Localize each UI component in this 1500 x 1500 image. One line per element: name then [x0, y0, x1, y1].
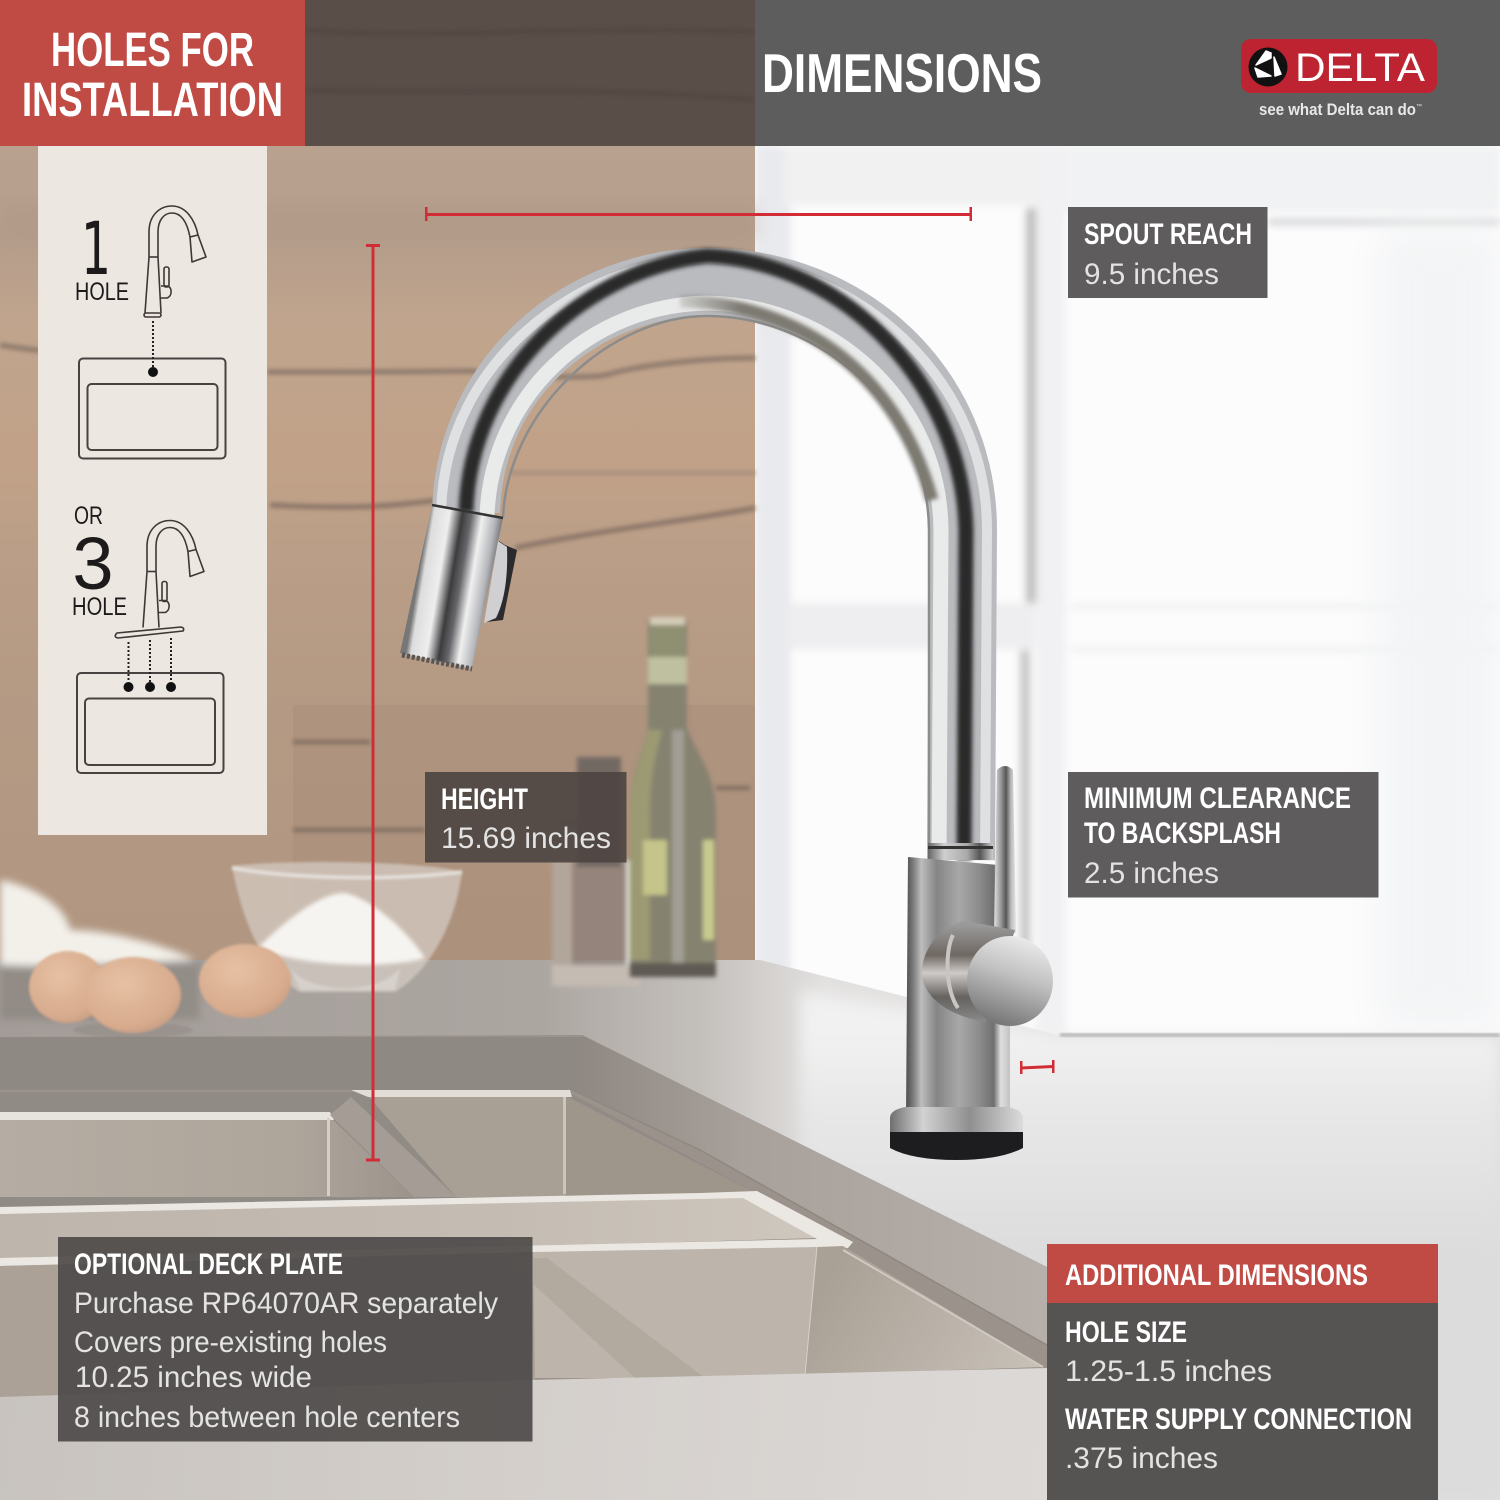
callout: optional deck plate: OPTIONAL DECK PLATE: [74, 1248, 343, 1281]
faucet: [400, 256, 1053, 1160]
icon: faucet on deck plate: [115, 520, 204, 638]
callout: height: [425, 772, 626, 862]
callout: spout reach: SPOUT REACH: [1084, 218, 1252, 251]
callout: minimum clearance: 2.5 inches: [1084, 857, 1219, 890]
hole size: 1.25-1.5 inches: [1065, 1355, 1272, 1388]
logo: Delta: [1241, 39, 1437, 119]
blurred props: towel, eggs, bowl, glass, bottle: [0, 617, 716, 1038]
header: holes for installation: [0, 0, 305, 146]
dimension line: height: [366, 244, 380, 1162]
callout: spout reach: [1068, 207, 1268, 298]
label: or 3 hole: OR: [74, 502, 103, 530]
panel heading: [1047, 1244, 1438, 1303]
label: or 3 hole: 3: [72, 522, 114, 605]
title: dimensions: DIMENSIONS: [762, 42, 1042, 104]
callout: optional deck plate: 8 inches between hole centers: [74, 1401, 460, 1434]
handle knob: [967, 936, 1053, 1026]
wine bottle: [630, 617, 716, 977]
bowl divider: [330, 1097, 456, 1197]
label: or 3 hole: HOLE: [72, 593, 127, 621]
callout: optional deck plate: Purchase RP64070AR separately: [74, 1287, 498, 1320]
drinking glass and grinder: [552, 757, 640, 986]
window wall: [755, 146, 1500, 1106]
kitchen counter: [0, 960, 1500, 1500]
panel: additional dimensions: [1047, 1244, 1438, 1500]
counter edge band: [568, 1035, 1047, 1345]
callout: minimum clearance: MINIMUM CLEARANCE: [1084, 782, 1351, 815]
label: 1 hole: HOLE: [75, 278, 129, 306]
panel: holes for installation diagrams: [38, 146, 267, 835]
below rim walls: [0, 1252, 535, 1400]
callout: optional deck plate: Covers pre-existing holes: [74, 1326, 387, 1359]
wood backsplash: [0, 146, 755, 1026]
icon: faucet: [144, 206, 206, 317]
header: holes for installation: INSTALLATION: [22, 74, 283, 127]
callout: optional deck plate: 10.25 inches wide: [75, 1361, 312, 1394]
callout: minimum clearance: TO BACKSPLASH: [1084, 817, 1281, 850]
callout: height: HEIGHT: [441, 783, 528, 816]
water supply connection: .375 inches: [1065, 1442, 1218, 1475]
header: holes for installation: HOLES FOR: [51, 24, 254, 77]
water supply connection: WATER SUPPLY CONNECTION: [1065, 1403, 1412, 1436]
sink: [0, 1035, 1047, 1500]
panel heading: ADDITIONAL DIMENSIONS: [1065, 1259, 1368, 1292]
diagram: 3 hole: [72, 502, 224, 773]
lever: [994, 766, 1016, 933]
logo: Delta: see what Delta can do: [1259, 100, 1416, 119]
collar: [928, 843, 993, 860]
hole size: HOLE SIZE: [1065, 1316, 1187, 1349]
label: 1 hole: 1: [81, 207, 111, 292]
callout: spout reach: 9.5 inches: [1084, 258, 1219, 291]
foreground deck: [0, 1368, 1047, 1500]
towel and flour: [0, 880, 200, 1020]
dimension line: spout reach: [425, 207, 972, 221]
pull-down spray head: [400, 505, 517, 669]
glass bowl: [232, 862, 462, 992]
label: or 3 hole: [72, 502, 127, 621]
icon: sink with three holes: [77, 638, 224, 773]
eggs: [29, 944, 291, 1038]
base ring and black pad: [890, 1107, 1023, 1160]
handle barrel: [922, 921, 1015, 1022]
callout: height: 15.69 inches: [441, 822, 611, 855]
logo: Delta: ™: [1416, 103, 1422, 110]
spout tube: [441, 256, 987, 860]
water supply connection: [1065, 1403, 1412, 1475]
bowl middle back wall: [368, 1096, 566, 1197]
logo: Delta: DELTA: [1295, 46, 1425, 90]
hole size: [1065, 1316, 1272, 1388]
bowl left back wall: [0, 1117, 414, 1197]
icon: sink with one hole: [79, 321, 226, 458]
callout: optional deck plate: [58, 1237, 532, 1442]
callout: minimum clearance: [1068, 772, 1378, 898]
diagram: 1 hole: [75, 206, 226, 458]
dimension line: minimum clearance: [1020, 1060, 1054, 1074]
header band: [0, 0, 1500, 146]
base body: [906, 857, 1010, 1112]
front bowl: [0, 1197, 817, 1262]
